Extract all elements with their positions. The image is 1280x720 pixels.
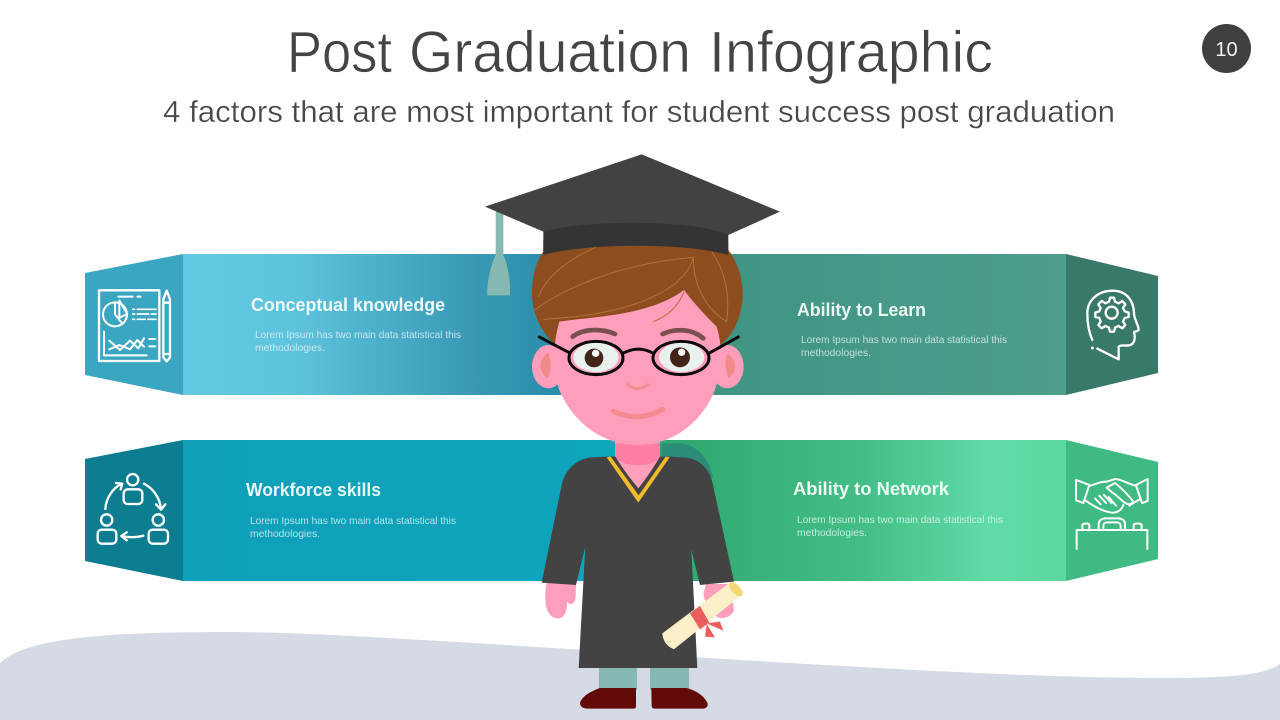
gown [542,457,734,668]
panel: workforce skills [85,440,618,581]
mouth [613,409,663,417]
ribbon [690,606,723,637]
tassel [487,212,510,295]
subtitle: 4 factors that are most important for student success post graduation [163,94,1115,129]
eyebrows [573,330,615,337]
diploma [662,580,745,649]
glasses [539,337,738,375]
icon: three people cycle [98,474,168,544]
description: methodologies. [801,347,871,359]
description: methodologies. [255,342,325,354]
description: Lorem Ipsum has two main data statistical this [255,329,461,341]
background wave [0,632,1280,720]
heading: Ability to Learn [797,300,926,320]
graduate character [485,154,780,709]
ears [532,345,565,388]
hair back [532,242,743,347]
page number badge [1202,24,1251,73]
description: Lorem Ipsum has two main data statistical this [801,334,1007,346]
body and gown [542,440,745,709]
description [797,514,1003,539]
description: Lorem Ipsum has two main data statistical this [250,515,456,527]
description [250,515,456,540]
title: Infographic [709,20,993,85]
mortarboard [543,217,728,255]
panel: ability to learn [710,254,1158,395]
left hand [545,583,576,618]
right hand [704,584,734,618]
page number badge: 10 [1215,39,1238,61]
legs [599,667,689,690]
eyes [573,343,619,372]
description: methodologies. [797,527,867,539]
nose [627,384,648,388]
panel: ability to network [660,440,1158,581]
title: Graduation [409,20,691,85]
heading: Ability to Network [793,479,950,499]
face [554,290,721,445]
panel: conceptual knowledge [85,254,563,395]
shoes [580,688,708,709]
collar [607,457,670,503]
description: methodologies. [250,528,320,540]
icon: head with gear [1087,291,1139,359]
head [485,154,780,445]
description [255,329,461,354]
icon: handshake and briefcase [1076,479,1148,549]
icon: report with charts and pencil [99,290,170,361]
title: Post [287,20,392,85]
description [801,334,1007,359]
shoulder shadow [662,443,713,478]
heading: Conceptual knowledge [251,295,445,315]
description: Lorem Ipsum has two main data statistical this [797,514,1003,526]
heading: Workforce skills [246,480,381,500]
neck [615,440,660,490]
hair strands [535,247,728,322]
